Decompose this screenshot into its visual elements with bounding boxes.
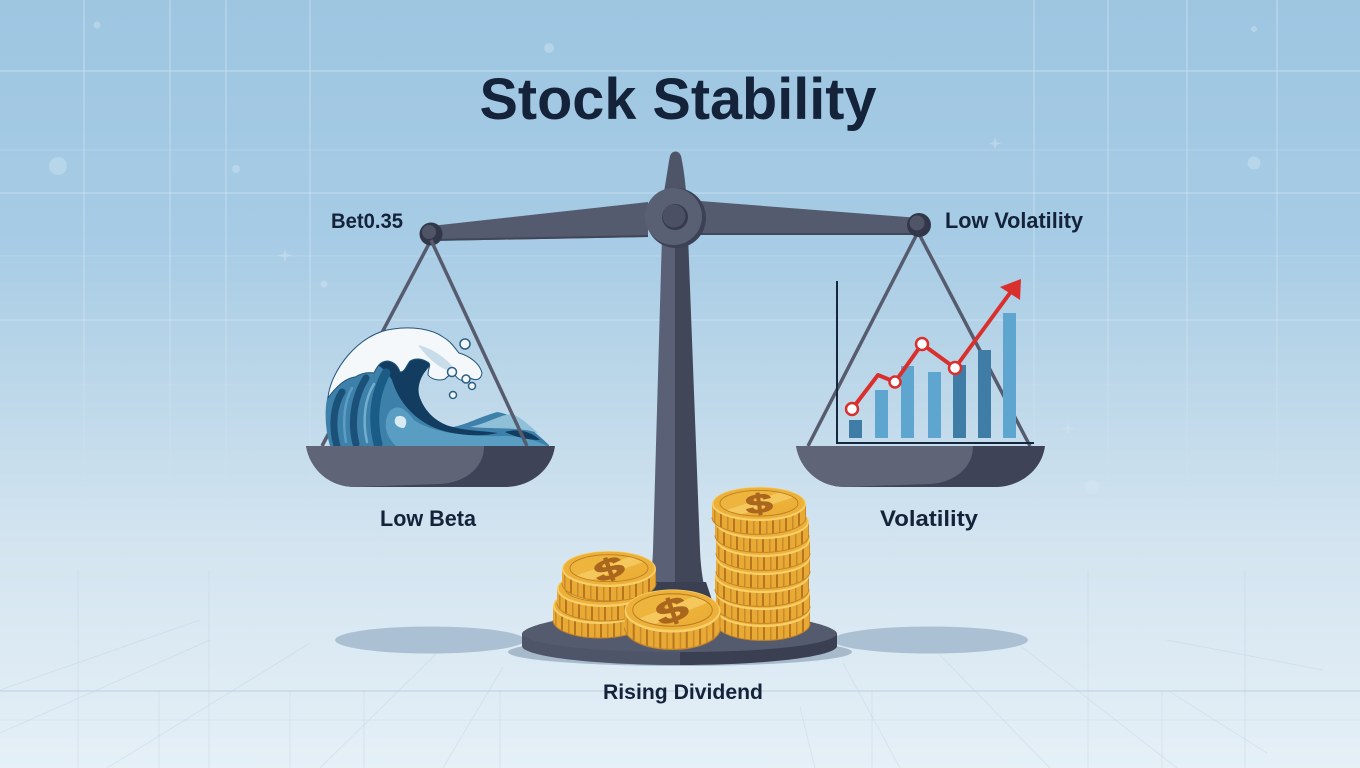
right strings: [808, 232, 1030, 446]
label: low volatility: Low Volatility: [945, 208, 1084, 233]
left pan: [306, 446, 555, 487]
wave bottom sweep: [386, 407, 547, 446]
coins: [553, 487, 810, 649]
wave foam crest: [328, 328, 482, 398]
wave dark core: [369, 353, 498, 435]
left coin stack: $: [590, 550, 629, 590]
chart: [837, 279, 1034, 443]
right pivot: [907, 213, 931, 237]
floor shadows: [335, 626, 1028, 666]
right coin stack: $: [744, 487, 774, 521]
label: beta value: Bet0.35: [331, 210, 403, 233]
hub: [645, 188, 706, 248]
wave left stripes: [334, 373, 386, 446]
label: low beta: Low Beta: [380, 506, 477, 531]
label: volatility: Volatility: [880, 506, 979, 531]
right pan: [796, 446, 1045, 487]
bars: [849, 313, 1016, 438]
left pivot: [420, 222, 442, 246]
front coin: $: [650, 588, 693, 633]
left strings: [322, 240, 431, 446]
left coin stack: [553, 550, 656, 638]
beam: [431, 201, 919, 241]
icon: wave: [326, 240, 549, 446]
axes: [837, 281, 1034, 443]
title: Stock Stability: [480, 67, 876, 132]
right string over wave: [431, 240, 527, 446]
front coin: [625, 588, 720, 649]
wave spray: [448, 339, 476, 398]
scale base: [522, 610, 837, 665]
label: rising dividend: Rising Dividend: [603, 681, 763, 704]
balance scale: [322, 152, 1030, 665]
right coin stack: [712, 487, 810, 640]
scale column: [636, 235, 716, 612]
wave body: [326, 329, 549, 446]
red trend arrow: [846, 279, 1021, 415]
scale top spike: [664, 152, 686, 192]
